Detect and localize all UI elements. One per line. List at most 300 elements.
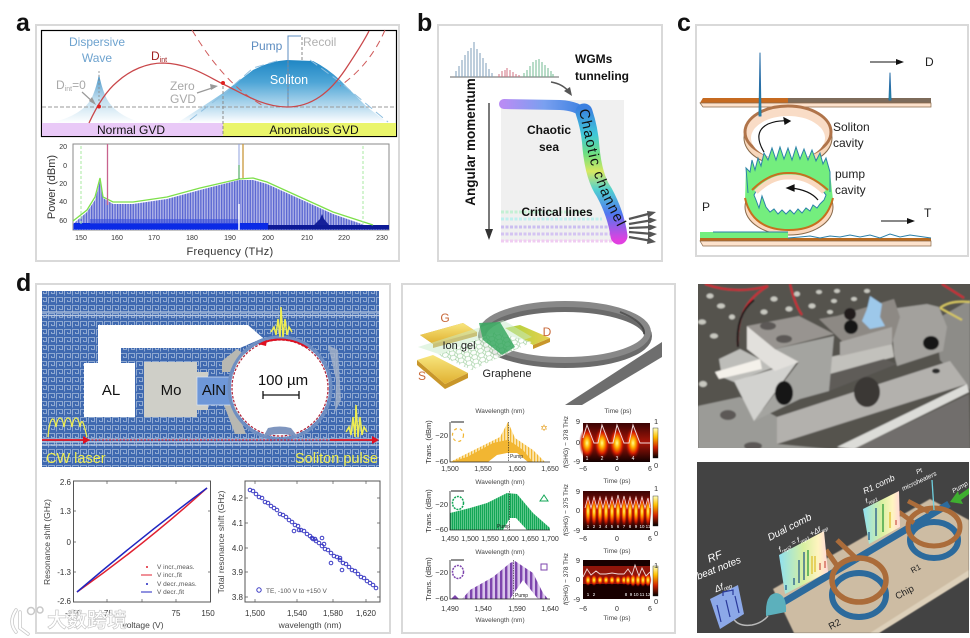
- power spectrum chart: 170: [148, 235, 160, 242]
- labels: GVD: [170, 92, 196, 106]
- panel c labels: D: [925, 55, 934, 69]
- chaotic channel: Chaotic channel: [580, 110, 626, 226]
- heatmap row 2: 0: [615, 536, 619, 543]
- spectrum comb: [73, 180, 389, 230]
- heatmap row 2: 11: [646, 524, 651, 529]
- spectrum row 2: [424, 489, 559, 556]
- axis label: Angular momentum: [463, 78, 478, 206]
- top axis labels: Time (ps): [604, 408, 632, 415]
- base plate: [698, 397, 830, 449]
- labels: =0: [72, 78, 86, 92]
- arrow head: [564, 87, 572, 96]
- panel middle: graphene device: [402, 284, 675, 633]
- spectrum row 2: 1,550: [481, 536, 499, 543]
- axis arrow: [488, 103, 490, 238]
- device labels: [418, 311, 552, 383]
- device labels: D: [543, 325, 552, 339]
- gvd strips: Normal GVD: [97, 123, 165, 137]
- heatmap row 3: Time (ps): [603, 615, 631, 622]
- blue bus waveguide: [782, 504, 949, 603]
- spectrum row 1: Trans. (dBm): [424, 420, 433, 464]
- power spectrum chart: 150: [75, 235, 87, 242]
- spectrum row 2: 1,450: [441, 536, 459, 543]
- legend: TE, -100 V to +150 V: [266, 588, 328, 595]
- spectrum row 3: [424, 557, 559, 624]
- heatmap row 1: Time (ps): [603, 478, 631, 485]
- sea label: Chaotic: [527, 123, 571, 137]
- heatmap row 1: −6: [579, 466, 587, 473]
- power spectrum chart: 40: [59, 199, 67, 206]
- heatmap row 1: 1: [586, 456, 589, 462]
- gvd strips: Anomalous GVD: [269, 123, 359, 137]
- resonance vs voltage chart: 2.6: [60, 478, 72, 487]
- heatmap row 3: 10: [633, 592, 639, 597]
- heatmap row 3: 0: [576, 575, 580, 584]
- power spectrum chart: 20: [59, 144, 67, 151]
- spectrum row 1: 1,550: [474, 466, 492, 473]
- gray pointer arrows: [82, 87, 215, 103]
- label b: b: [417, 9, 432, 37]
- bus waveguide: [565, 342, 662, 405]
- illustration labels: Δf: [713, 582, 725, 594]
- spectrum row 2: −60: [435, 525, 448, 534]
- power spectrum chart: 220: [338, 235, 350, 242]
- panel d: [36, 284, 390, 633]
- fiber holder: [719, 349, 775, 382]
- total shift vs wavelength chart: Total resonance shift (GHz): [216, 490, 226, 593]
- sea label: Critical lines: [521, 205, 593, 219]
- heatmap row 3: 12: [645, 592, 651, 597]
- power spectrum chart: 190: [224, 235, 236, 242]
- spectrum row 1: 1,650: [541, 466, 559, 473]
- chip labels: R2: [827, 617, 843, 633]
- sea label: [521, 123, 593, 219]
- illustration labels: rep2: [781, 545, 793, 555]
- direction arrows: [870, 59, 915, 224]
- heatmap row 2: -9: [573, 526, 580, 535]
- heatmap row 3: 1: [587, 592, 590, 597]
- spectrum row 2: 1,650: [521, 536, 539, 543]
- illustration labels: Dual comb: [766, 512, 814, 544]
- legend: V incr.,meas.: [157, 564, 195, 571]
- total shift vs wavelength chart: [216, 481, 380, 630]
- heatmap row 3: [563, 553, 658, 622]
- heatmap row 2: 0: [654, 529, 658, 538]
- illustration labels: rep: [723, 584, 734, 593]
- heatmap row 2: 9: [635, 524, 638, 529]
- heatmap row 2: f(SHG) − 375 THz: [563, 484, 570, 536]
- power spectrum chart: 160: [111, 235, 123, 242]
- bottom waveguide: [700, 232, 931, 246]
- labels: int: [160, 57, 167, 64]
- scale bar: [263, 391, 299, 399]
- tabs: [197, 372, 208, 410]
- illustration labels: Pt: [915, 467, 925, 476]
- power spectrum chart: 0: [63, 163, 67, 170]
- labels: D: [151, 49, 160, 63]
- output arrows: [629, 211, 657, 244]
- panel c labels: cavity: [833, 136, 864, 150]
- dashed parabolas: [192, 30, 385, 105]
- power spectrum chart: 60: [59, 218, 67, 225]
- power spectrum chart: 200: [262, 235, 274, 242]
- envelope: [73, 178, 373, 225]
- spectrum row 1: Wavelength (nm): [475, 479, 525, 486]
- power spectrum chart: [46, 144, 389, 258]
- left lower face: [734, 362, 797, 421]
- R2 ring: [832, 573, 886, 617]
- heatmap row 2: 5: [611, 524, 614, 529]
- heatmap row 1: 6: [648, 466, 652, 473]
- middle block top: [819, 299, 900, 356]
- chaotic sea: [501, 100, 624, 241]
- watermark logo: [12, 607, 43, 634]
- spectrum row 1: 1,500: [441, 466, 459, 473]
- coupler notch: [263, 426, 298, 437]
- panel c labels: pump: [835, 167, 865, 181]
- dispersion diagram: [42, 30, 396, 137]
- gold contact G: [420, 323, 477, 348]
- device labels: Graphene: [483, 368, 531, 380]
- labels: Pump: [251, 39, 283, 53]
- total shift vs wavelength chart: 4.1: [232, 519, 244, 528]
- total shift vs wavelength chart: 1,500: [245, 609, 266, 618]
- tunneling arrow: [551, 82, 569, 92]
- critical lines: [501, 212, 622, 241]
- panel c labels: Soliton: [833, 120, 870, 134]
- mode histograms: [450, 42, 559, 77]
- ferrule: [715, 359, 762, 379]
- red beam: [42, 436, 379, 444]
- heatmap row 1: 1: [654, 417, 658, 426]
- screws and holes: [720, 308, 940, 450]
- left block top: [747, 316, 834, 349]
- chaotic channel: [499, 99, 628, 244]
- panel c: [696, 25, 968, 256]
- resonance vs voltage chart: -150: [65, 609, 82, 618]
- heatmap row 2: 0: [576, 506, 580, 515]
- illustration labels: rep: [821, 526, 830, 535]
- heatmap row 2: 1: [587, 524, 590, 529]
- heatmap row 1: 2: [601, 456, 604, 462]
- heatmap row 2: Time (ps): [603, 548, 631, 555]
- Dint curve: [89, 31, 369, 123]
- illustration labels: [695, 467, 970, 596]
- heatmap row 2: 1: [654, 484, 658, 493]
- labels: AlN: [202, 382, 226, 399]
- sea label: sea: [539, 140, 559, 154]
- power spectrum chart: Power (dBm): [46, 155, 58, 219]
- illustration labels: microheaters: [901, 470, 939, 493]
- panel b: [437, 24, 663, 262]
- heading line 2: tunneling: [575, 69, 629, 83]
- heatmap row 3: 11: [640, 592, 645, 597]
- spectrum row 3: Pump: [515, 593, 528, 599]
- heatmap row 2: 8: [629, 524, 632, 529]
- rf card: [710, 585, 744, 629]
- pulse top: [271, 307, 292, 337]
- labels: Recoil: [303, 35, 336, 49]
- heatmap row 2: −6: [579, 536, 587, 543]
- spectrum row 1: ✡: [540, 423, 548, 433]
- heatmap row 2: 6: [648, 536, 652, 543]
- heatmap row 3: 8: [625, 592, 628, 597]
- chip labels: [827, 562, 923, 633]
- heatmap row 2: 10: [639, 524, 645, 529]
- panel c labels: [702, 55, 934, 220]
- spectrum row 2: Trans. (dBm): [424, 489, 433, 533]
- soliton cavity ring: [744, 106, 832, 166]
- resonance vs voltage chart: voltage (V): [122, 620, 164, 630]
- total shift vs wavelength chart: 1,540: [287, 609, 308, 618]
- total shift vs wavelength chart: wavelength (nm): [278, 620, 342, 630]
- illustration labels: rep1: [799, 535, 811, 545]
- spectrum row 1: 1,600: [508, 466, 526, 473]
- total shift vs wavelength chart: 4.0: [232, 544, 244, 553]
- heatmap row 3: 2: [593, 592, 596, 597]
- spectrum row 2: Wavelength (nm): [475, 549, 525, 556]
- heatmap row 2: 2: [593, 524, 596, 529]
- top waveguide: [700, 98, 931, 107]
- total shift vs wavelength chart: 3.9: [232, 568, 244, 577]
- pt line: [932, 480, 934, 510]
- resonance vs voltage chart: -2.6: [57, 597, 72, 606]
- dual comb card: [779, 531, 828, 594]
- label a: a: [16, 9, 31, 37]
- heatmap row 3: 0: [615, 606, 619, 613]
- heatmap row 2: 7: [623, 524, 626, 529]
- al pad: [84, 325, 263, 417]
- inner hole: [754, 177, 826, 214]
- heatmap row 2: 6: [617, 524, 620, 529]
- heatmap row 3: 9: [576, 556, 580, 565]
- spectrum row 3: 1,490: [441, 606, 459, 613]
- heatmap row 1: 3: [616, 456, 619, 462]
- dispersive wave peak: [50, 74, 143, 123]
- right faint gray: [328, 345, 341, 412]
- pump arrow: [950, 488, 969, 504]
- red arc: [262, 339, 308, 348]
- heatmap row 3: 9: [630, 592, 633, 597]
- microscope chip image: [42, 291, 379, 467]
- panel a: [36, 25, 399, 261]
- label d: d: [16, 269, 31, 297]
- total shift vs wavelength chart: 4.2: [232, 494, 244, 503]
- long base bar: [777, 361, 967, 444]
- grating coupler dome: [766, 593, 786, 616]
- middle block front: [840, 327, 892, 356]
- resonance vs voltage chart: 1.3: [60, 507, 72, 516]
- heatmap row 1: 0: [615, 466, 619, 473]
- aln pad: [197, 377, 233, 405]
- labels: Wave: [82, 51, 112, 65]
- heatmap row 1: 0: [576, 438, 580, 447]
- gold contact S: [417, 355, 468, 389]
- yellow captions: CW laser: [46, 451, 106, 467]
- illustration labels: = f: [788, 535, 802, 548]
- photo of device: [698, 284, 970, 448]
- illustration labels: f: [864, 498, 869, 505]
- R1 heater: [899, 501, 960, 546]
- heatmap row 1: 0: [654, 461, 658, 470]
- wedge: [747, 326, 799, 371]
- spectrum row 2: 1,500: [461, 536, 479, 543]
- spectrum row 1: −60: [435, 457, 448, 466]
- R2 heater: [826, 540, 886, 602]
- input wave packet: [48, 418, 87, 437]
- chip: [773, 499, 969, 633]
- power spectrum chart: Frequency (THz): [186, 246, 274, 258]
- labels: D: [56, 78, 65, 92]
- ring shade: [620, 312, 644, 334]
- device illustration: [417, 304, 662, 405]
- wires: [705, 284, 964, 347]
- legend: V incr.,fit: [157, 572, 182, 579]
- spectrum row 3: −60: [435, 594, 448, 603]
- ring resonator: [229, 337, 331, 439]
- soliton spectrum: [177, 60, 388, 123]
- dark bottom right: [854, 394, 970, 449]
- power spectrum chart: 210: [301, 235, 313, 242]
- dark gap: [829, 359, 897, 391]
- spectrum row 1: −20: [435, 431, 448, 440]
- gray wedge: [222, 349, 246, 434]
- total shift vs wavelength chart: 3.8: [232, 593, 244, 602]
- device labels: G: [440, 311, 450, 325]
- heatmap row 3: −6: [579, 606, 587, 613]
- illustration labels: f: [777, 545, 783, 554]
- illustration labels: RF: [706, 548, 725, 566]
- ion gel: [418, 320, 532, 362]
- heading: WGMs: [575, 52, 613, 66]
- chip labels: R1: [909, 562, 923, 575]
- spectrum row 2: 1,600: [501, 536, 519, 543]
- heatmap row 2: 9: [576, 487, 580, 496]
- soliton spikes: [759, 53, 891, 116]
- heatmap row 3: f(SHG) − 378 THz: [563, 553, 570, 605]
- resonance vs voltage chart: -1.3: [57, 568, 72, 577]
- panel c labels: P: [702, 200, 710, 214]
- graphene sheet: [438, 332, 532, 370]
- heatmap row 1: -9: [573, 457, 580, 466]
- resonance vs voltage chart: 150: [201, 609, 215, 618]
- left block right face: [754, 336, 834, 421]
- spectrum row 3: 1,590: [508, 606, 526, 613]
- spectrum row 3: Trans. (dBm): [424, 557, 433, 601]
- right side haze: [935, 300, 970, 390]
- spectrum row 3: Wavelength (nm): [475, 617, 525, 624]
- spectrum row 3: −20: [435, 568, 448, 577]
- heatmap row 1: [563, 416, 658, 485]
- scatter points: [248, 488, 378, 590]
- spectrum row 2: −20: [435, 500, 448, 509]
- labels: 100 µm: [258, 372, 308, 389]
- resonance vs voltage chart: 75: [172, 609, 181, 618]
- illustration labels: R1 comb: [861, 472, 897, 496]
- heatmap row 1: 9: [576, 417, 580, 426]
- panel c labels: T: [924, 206, 932, 220]
- rail: [837, 384, 969, 449]
- resonance vs voltage chart: -75: [101, 609, 113, 618]
- spectrum row 2: Pump: [497, 524, 510, 530]
- heatmap row 3: 6: [648, 606, 652, 613]
- total shift vs wavelength chart: 1,580: [323, 609, 344, 618]
- heatmap row 3: 1: [654, 561, 658, 570]
- table dots: [698, 289, 870, 387]
- heatmap row 1: f(SHG) − 378 THz: [563, 416, 570, 468]
- resonance vs voltage chart: [42, 478, 215, 630]
- labels: Dispersive: [69, 35, 125, 49]
- panel c labels: cavity: [835, 183, 866, 197]
- illustration labels: rep1: [868, 497, 879, 506]
- pulse right: [346, 405, 367, 437]
- heatmap row 2: 4: [605, 524, 608, 529]
- gvd strips: [42, 123, 396, 137]
- illustration labels: Pump: [951, 480, 970, 495]
- resonance vs voltage chart: 0: [67, 538, 72, 547]
- top axis labels: Wavelength (nm): [475, 408, 525, 415]
- watermark text: 大数跨境: [47, 608, 127, 632]
- labels: Soliton: [270, 73, 308, 87]
- top axis labels: [475, 408, 632, 415]
- under middle: [830, 344, 894, 374]
- labels: AL: [102, 382, 120, 399]
- legend: [141, 564, 197, 596]
- legend: V decr.,meas.: [157, 581, 197, 588]
- labels: int: [65, 86, 72, 93]
- ring waveguide lower wall: [482, 308, 648, 364]
- heatmap row 1: 4: [632, 456, 635, 462]
- labels: Mo: [161, 382, 181, 399]
- chip labels: Chip: [894, 583, 916, 602]
- heatmap row 3: 0: [654, 597, 658, 606]
- watermark: [12, 607, 127, 634]
- axis arrow head: [485, 229, 493, 240]
- legend: V decr.,fit: [157, 589, 184, 596]
- labels: [56, 35, 336, 106]
- power spectrum chart: 180: [186, 235, 198, 242]
- heatmap row 3: -9: [573, 595, 580, 604]
- spectrum row 1: [424, 420, 559, 486]
- pump cavity ring: [745, 147, 833, 235]
- spectrum row 3: 1,640: [541, 606, 559, 613]
- blue arrow: [862, 296, 885, 329]
- device labels: Ion gel: [442, 340, 476, 352]
- device labels: S: [418, 369, 426, 383]
- spectrum row 2: 1,700: [541, 536, 559, 543]
- molybdenum pad: [144, 362, 197, 417]
- green modulated section: [479, 322, 515, 355]
- pump line: [288, 36, 301, 107]
- heatmap row 2: 3: [599, 524, 602, 529]
- labels: Zero: [170, 79, 195, 93]
- rf cable: [733, 616, 768, 625]
- gold contact D: [505, 325, 550, 349]
- spectrum row 1: Pump: [510, 454, 523, 460]
- rf card lines: [717, 590, 739, 622]
- green comb field: [745, 147, 833, 230]
- heatmap row 2: [563, 484, 658, 555]
- circulation arrows: [759, 118, 818, 200]
- resonance vs voltage chart: Resonance shift (GHz): [42, 499, 52, 585]
- power spectrum chart: 230: [376, 235, 388, 242]
- ring waveguide top: [482, 304, 648, 360]
- spectrum row 3: 1,540: [474, 606, 492, 613]
- dual comb chip illustration: [695, 462, 970, 633]
- r1 comb card: [863, 491, 900, 544]
- illustration labels: beat notes: [695, 555, 743, 583]
- R1 ring: [910, 522, 958, 558]
